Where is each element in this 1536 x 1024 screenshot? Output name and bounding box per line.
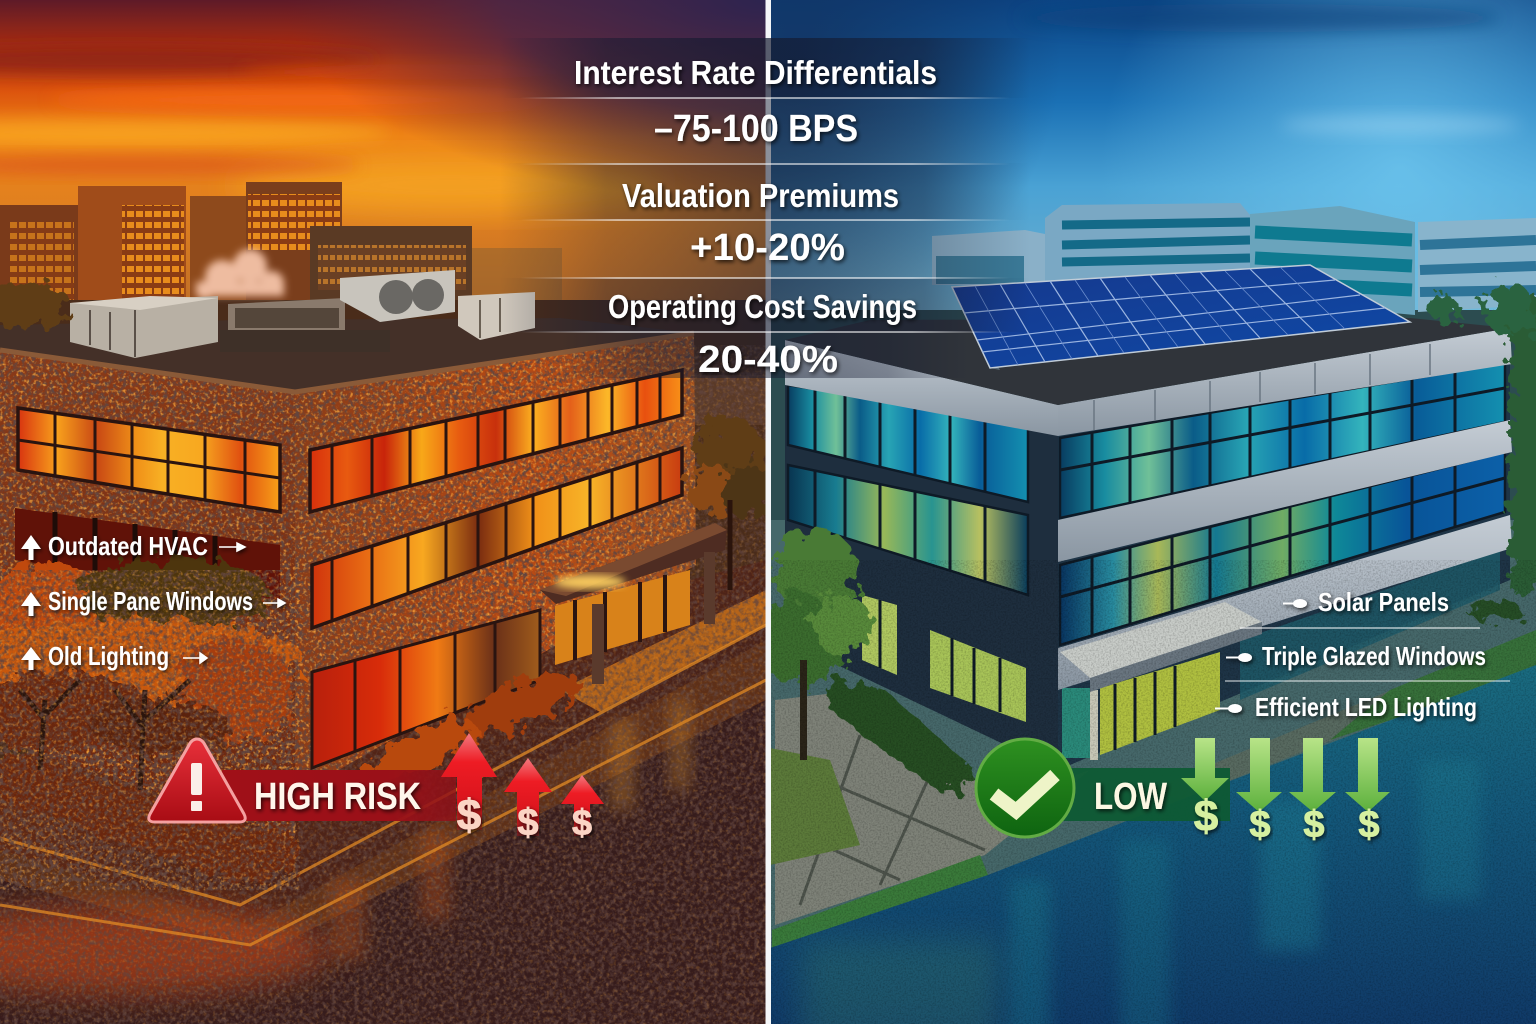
foliage speckle bbox=[0, 570, 300, 890]
icon: falling cost arrows: $ bbox=[1194, 792, 1218, 841]
ground base behind building bbox=[770, 310, 1536, 710]
glass row: right face upper bbox=[1060, 363, 1505, 518]
background office buildings bbox=[932, 203, 1536, 315]
icon: rising cost arrows: $ bbox=[572, 802, 592, 843]
trees and autumn foliage bbox=[0, 283, 778, 880]
callout: outdated HVAC: Outdated HVAC bbox=[48, 531, 208, 561]
metric: interest rate differentials: Interest Rate Differentials bbox=[574, 54, 937, 91]
banner bbox=[222, 770, 456, 821]
panel: central metrics bbox=[500, 38, 1030, 381]
building spandrel bands bbox=[785, 328, 1512, 690]
trees and hedges bbox=[756, 284, 1536, 800]
callout: old lighting: Old Lighting bbox=[48, 641, 169, 671]
badge: high risk bbox=[149, 733, 604, 844]
window row: right face upper bbox=[310, 370, 682, 512]
metric: valuation premiums: +10-20% bbox=[690, 227, 845, 269]
icon: check mark circle bbox=[976, 739, 1074, 837]
banner bbox=[1060, 768, 1230, 821]
callout: efficient LED lighting: Efficient LED Lighting bbox=[1255, 692, 1477, 722]
roof bbox=[785, 318, 1510, 405]
window row: right face middle bbox=[312, 448, 682, 628]
callouts: green building features bbox=[1215, 587, 1510, 722]
sky: clear blue bbox=[770, 0, 1536, 340]
solar array bbox=[952, 265, 1410, 370]
ground: wet pavement bbox=[0, 560, 766, 1024]
icon: falling cost arrows: $ bbox=[1303, 804, 1325, 846]
panel: low risk building scene bbox=[756, 0, 1536, 1024]
ground speckle bbox=[0, 345, 766, 1024]
panel seams bbox=[1094, 344, 1430, 430]
badge: low risk bbox=[976, 738, 1390, 846]
icon: rising cost arrows: $ bbox=[457, 791, 481, 840]
HVAC units bbox=[70, 270, 535, 358]
icon: warning triangle bbox=[149, 739, 245, 822]
glass row: left face upper bbox=[788, 385, 1028, 502]
building right face bbox=[295, 335, 696, 795]
building left face bbox=[0, 352, 295, 838]
steam cloud bbox=[196, 249, 284, 299]
callout: solar panels bbox=[1283, 587, 1449, 617]
metric: interest rate differentials: –75-100 BPS bbox=[654, 108, 858, 150]
callout: single pane windows: Single Pane Windows bbox=[48, 586, 253, 616]
background wall at right of building bbox=[690, 375, 766, 425]
metric: valuation premiums: Valuation Premiums bbox=[622, 177, 899, 214]
speckle grain overlay bbox=[770, 560, 1536, 1024]
panel: high risk building scene bbox=[0, 0, 778, 1024]
roof bbox=[0, 318, 694, 392]
tree trunk bbox=[800, 660, 807, 760]
badge label: HIGH RISK bbox=[254, 776, 421, 818]
glass row: right face middle bbox=[1060, 452, 1505, 645]
tree trunks bbox=[20, 500, 730, 790]
window row: left face bbox=[18, 408, 280, 512]
glass row: left face lower bbox=[788, 465, 1028, 722]
window row: ground floor bbox=[15, 508, 690, 768]
background city buildings bbox=[0, 182, 562, 300]
center divider bbox=[766, 0, 771, 1024]
building right face bbox=[1058, 330, 1510, 770]
building left face bbox=[785, 340, 1058, 770]
callouts: old building problems bbox=[21, 531, 285, 671]
entrance canopy bbox=[540, 523, 727, 684]
icon: falling cost arrows bbox=[1181, 738, 1390, 846]
icon: falling cost arrows: $ bbox=[1358, 804, 1380, 846]
panel background bands bbox=[500, 38, 1030, 378]
rust speckle on facade bbox=[0, 336, 696, 838]
metric: operating cost savings: 20-40% bbox=[698, 339, 838, 381]
badge label: LOW bbox=[1094, 776, 1167, 818]
glass: ground floor bbox=[1062, 550, 1500, 760]
metric: operating cost savings bbox=[608, 288, 917, 381]
sky: sunset bbox=[0, 0, 766, 300]
ground base behind building bbox=[0, 300, 766, 800]
icon: falling cost arrows: $ bbox=[1249, 804, 1271, 846]
icon: rising cost arrows bbox=[441, 733, 604, 844]
metric: valuation premiums bbox=[622, 177, 899, 269]
metric: operating cost savings: Operating Cost Savings bbox=[608, 288, 917, 325]
metric: interest rate differentials bbox=[574, 54, 937, 150]
curb lines bbox=[0, 625, 766, 945]
ground: pavement and water bbox=[770, 520, 1536, 1024]
icon: rising cost arrows: $ bbox=[517, 802, 539, 844]
entrance canopy bbox=[1060, 602, 1262, 692]
callout: solar panels: Solar Panels bbox=[1318, 587, 1449, 617]
